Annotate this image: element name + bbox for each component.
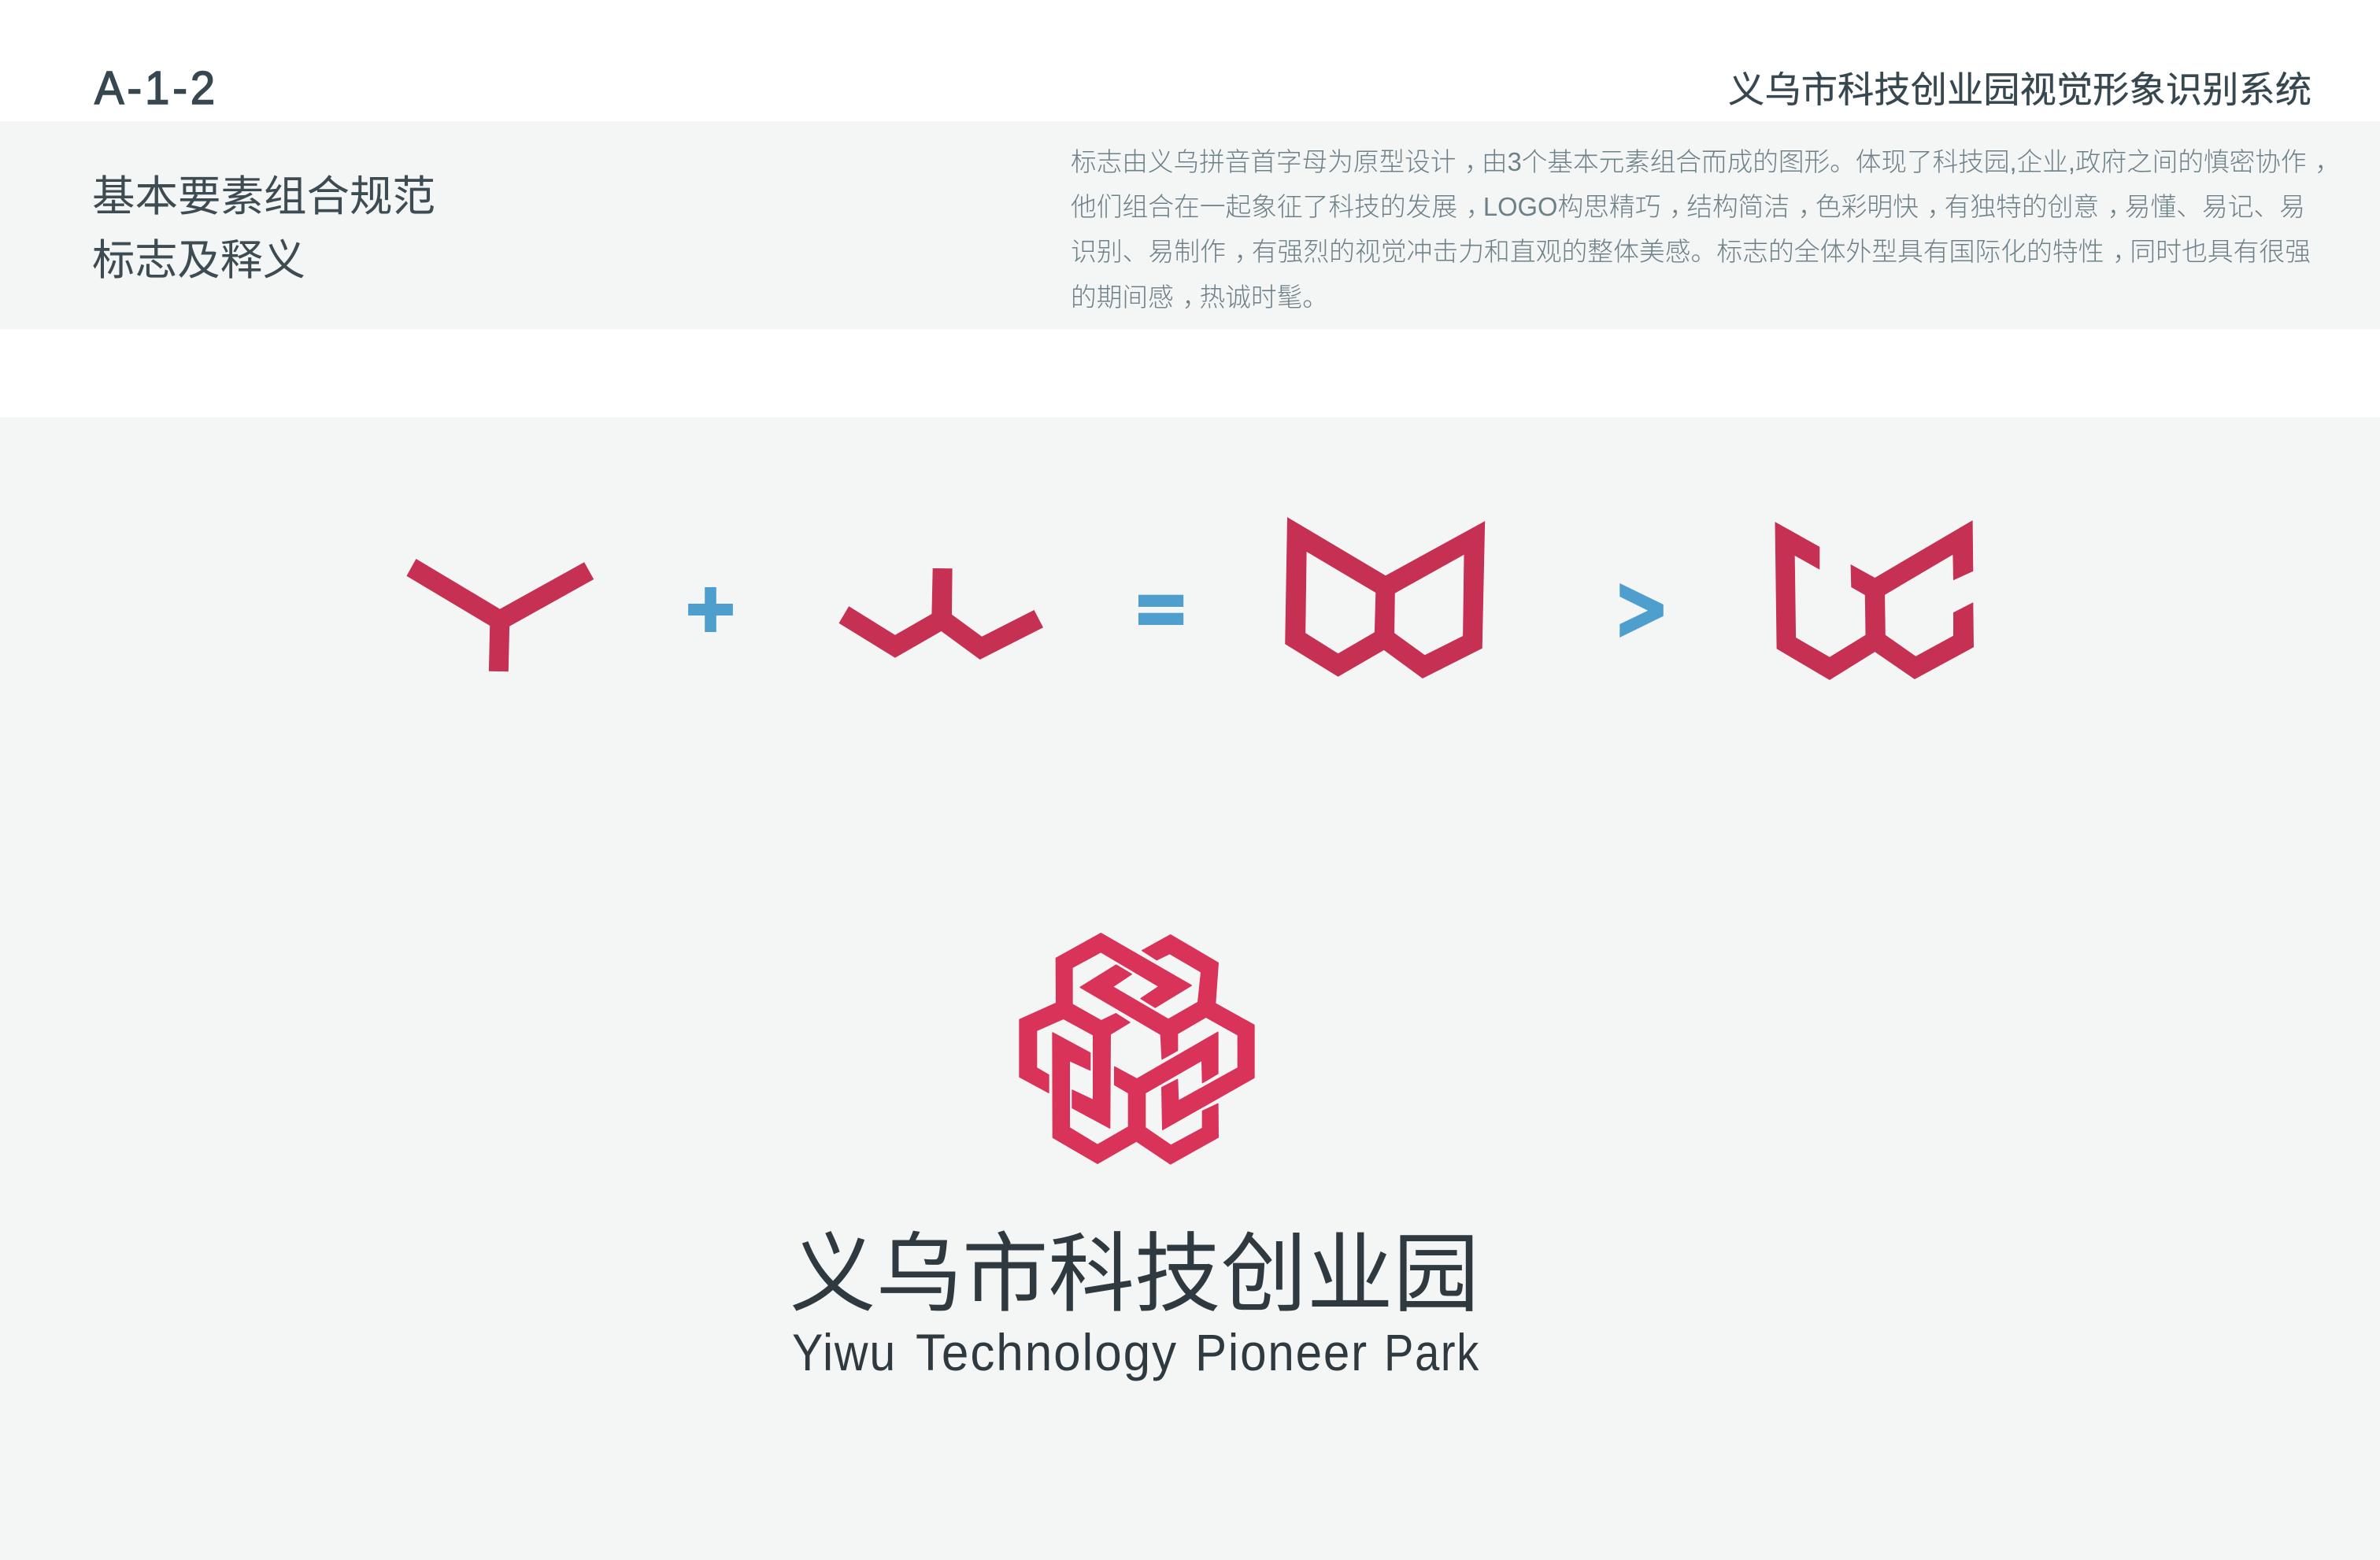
description paragraph: 标志由义乌拼音首字母为原型设计，由3个基本元素组合而成的图形。体现了科技园,企业,政府之间的慎密协作，: [1071, 147, 2341, 176]
panel: header band: [0, 121, 2380, 329]
logo wordmark: English: Park: [1384, 1323, 1480, 1381]
description paragraph: [1071, 147, 2341, 312]
logo mark: [1020, 933, 1254, 1164]
icon: Y element: [406, 559, 594, 671]
logo wordmark: English: Yiwu: [792, 1323, 897, 1381]
section heading: 标志及释义: [92, 237, 305, 284]
icon: combined shape: [1285, 517, 1485, 678]
icon: refined shape: [1775, 520, 1974, 680]
logo wordmark: Chinese: 义乌市科技创业园: [790, 1226, 1479, 1323]
icon: plus sign: [688, 587, 733, 632]
logo wordmark: English: [792, 1323, 1480, 1381]
description paragraph: 的期间感 ，热诚时髦。: [1071, 283, 1328, 312]
page code: A-1-2: [94, 62, 218, 114]
icon: chevron arrow: [1619, 583, 1664, 638]
icon: equals sign: [1138, 595, 1183, 625]
system title: 义乌市科技创业园视觉形象识别系统: [1728, 69, 2312, 110]
section heading: [92, 173, 435, 284]
icon: W element: [839, 568, 1043, 660]
description paragraph: 识别、易制作 ，有强烈的视觉冲击力和直观的整体美感。标志的全体外型具有国际化的特性，同时也具有很强: [1071, 237, 2311, 266]
panel: logo area: [0, 417, 2380, 1560]
logo wordmark: English: Technology: [916, 1323, 1178, 1381]
logo wordmark: English: Pioneer: [1195, 1323, 1368, 1381]
section heading: 基本要素组合规范: [92, 173, 435, 220]
description paragraph: 他们组合在一起象征了科技的发展，LOGO构思精巧 ，结构简洁 ，色彩明快 ，有独特的创意 ，易懂、易记、易: [1071, 192, 2305, 221]
